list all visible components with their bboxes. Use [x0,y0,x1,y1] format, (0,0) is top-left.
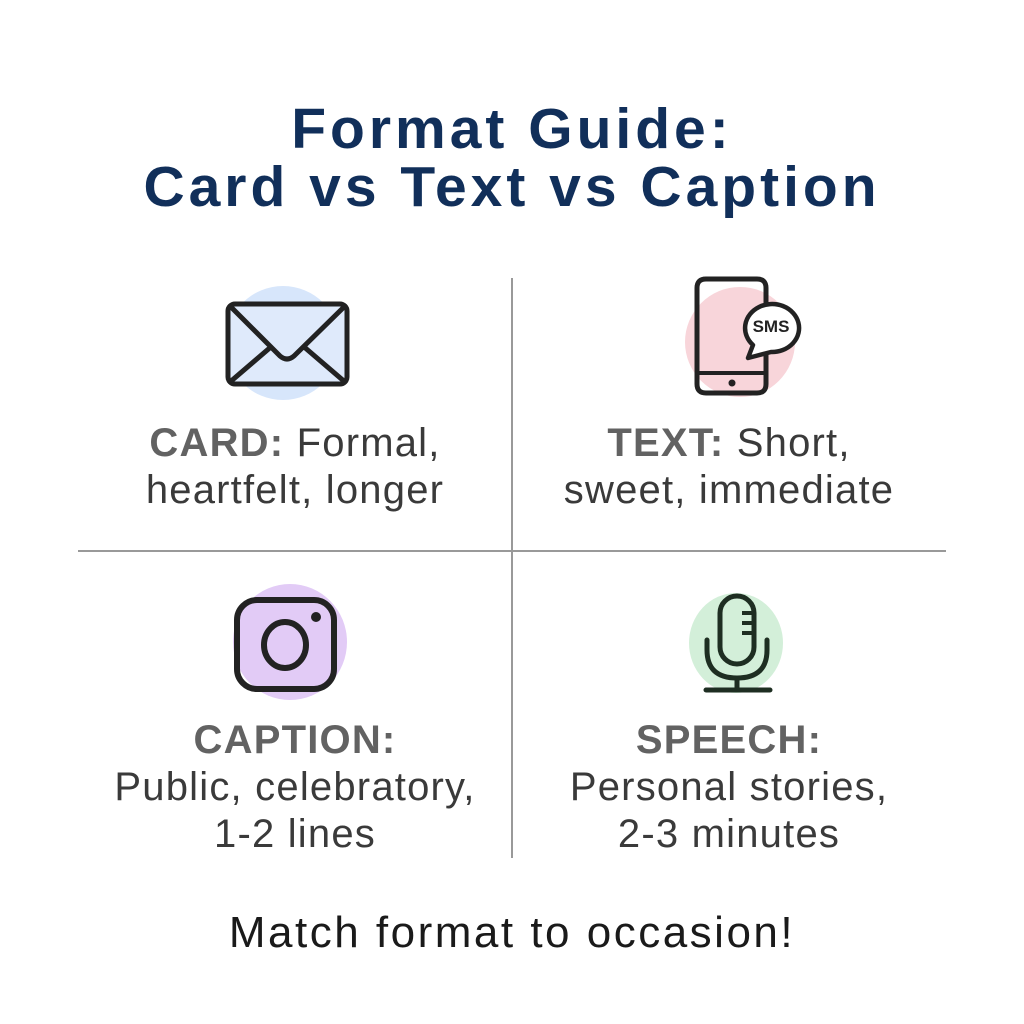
text: text [564,421,894,512]
text: speech: SPEECH: [636,718,822,762]
text: speech: Personal stories, [570,765,888,809]
icon: microphone [689,593,783,693]
icon: phone sms [685,276,802,397]
text: text: TEXT: Short, [607,421,851,465]
text: speech [570,718,888,856]
icon: phone sms: SMS [753,317,789,336]
icon: envelope [226,286,350,400]
text: card: CARD: Formal, [149,421,441,465]
title [143,97,881,219]
text: caption: Public, celebratory, [114,765,476,809]
panel: speech [570,593,888,856]
panel: text [564,276,894,512]
footer: Match format to occasion! [229,908,795,957]
text: card [146,421,444,512]
text: text: sweet, immediate [564,468,894,512]
text: caption: CAPTION: [194,718,396,762]
text: card: heartfelt, longer [146,468,444,512]
title: Format Guide: [291,97,733,161]
panel: card [146,286,444,512]
text: caption [114,718,476,856]
text: speech: 2-3 minutes [618,812,840,856]
title: Card vs Text vs Caption [143,155,881,219]
panel: caption [114,584,476,856]
text: caption: 1-2 lines [214,812,376,856]
icon: instagram [233,584,347,700]
